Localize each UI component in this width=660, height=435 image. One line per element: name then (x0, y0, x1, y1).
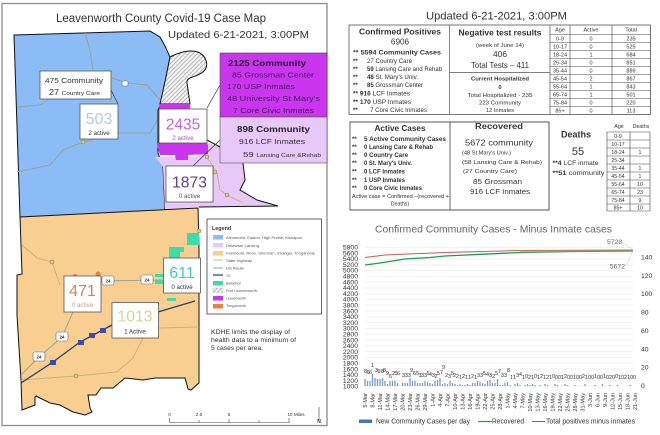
x-axis date labels: 19-Apr (476, 393, 482, 410)
current hospitalized: Current Hospitalized (471, 76, 529, 82)
age table: active and total: 684 (626, 52, 636, 58)
age table: active and total: 113 (627, 108, 635, 114)
x-axis date labels: 3-Jun (588, 393, 594, 407)
callout: 1013 (112, 302, 158, 338)
interstate markers (50, 328, 106, 365)
age table: active and total: 10-17 (553, 44, 567, 50)
panel: top stats table (349, 25, 650, 114)
age table: active and total: 1 (589, 92, 593, 98)
legend: 70 (226, 274, 230, 278)
current hospitalized: 0 (498, 85, 502, 91)
left axis: 5000 (343, 268, 358, 275)
KDHE note: health data to a minimum of (211, 337, 296, 344)
age table: active and total: 851 (626, 60, 636, 66)
callout: 2125 community (220, 53, 327, 117)
KDHE note: 5 cases per area. (211, 345, 263, 352)
legend: Basehor (226, 282, 242, 286)
age table: deaths: 18-24 (611, 150, 625, 156)
active cases: 1 USP Inmates (364, 178, 406, 184)
chart title: Confirmed Community Cases - Minus Inmate cases (375, 224, 612, 236)
age table: active and total: Age (555, 28, 565, 34)
age table: active and total: 25-34 (553, 60, 567, 66)
age table: active and total: 0 (589, 36, 593, 42)
age table: deaths: 1 (639, 174, 642, 180)
active cases: ** (352, 170, 357, 176)
callout: 471: 0 active (72, 302, 94, 309)
age table: active and total: 0 (589, 44, 593, 50)
chart legend: New Community Cases per day (376, 418, 470, 426)
age table: active and total: 45-54 (553, 76, 567, 82)
callout: 1873 (166, 166, 213, 202)
age table: deaths: 55-64 (611, 182, 625, 188)
age table: deaths: Deaths (633, 124, 650, 130)
recovered: Recovered (475, 122, 523, 131)
legend: US Route (226, 266, 244, 270)
age table: active and total: Total (625, 28, 637, 34)
callout: 471 (64, 276, 101, 312)
x-axis date labels: 1-Apr (430, 393, 436, 407)
legend (207, 219, 322, 314)
confirmed positives: ** (353, 75, 358, 81)
negative test results: Negative test results (458, 28, 542, 38)
age table: active and total: 0 (589, 108, 593, 114)
callout: 503: 503 (86, 111, 112, 128)
active cases: ** (352, 137, 357, 143)
bar data labels: 81134102101212100 (507, 368, 558, 381)
active cases: ** (352, 153, 357, 159)
age table: deaths: 10-17 (611, 142, 625, 148)
right axis: 100 (641, 291, 653, 298)
confirmed positives: ** (353, 59, 358, 65)
age table: active and total: 867 (626, 76, 636, 82)
age table: deaths: 35-44 (611, 166, 625, 172)
right axis: 120 (641, 273, 653, 280)
confirmed positives: ** 5594 Community Cases (353, 50, 442, 56)
x-axis date labels: 9-Jun (603, 393, 609, 407)
callout: 5728 (607, 239, 633, 250)
x-axis date labels: 4-Apr (438, 393, 444, 407)
age table: deaths: 1 (639, 166, 642, 172)
callout: 475 community: 475 Community (45, 76, 103, 85)
age table: active and total: 0-9 (556, 36, 564, 42)
age table: deaths: 85+ (614, 206, 622, 212)
legend: Alexandria, Easton, High Prairie, Kickapoo (226, 236, 302, 240)
left axis: 4600 (343, 279, 358, 286)
scale bar: 10 Miles (287, 412, 305, 417)
current hospitalized: 12 Inmates (486, 108, 514, 114)
x-axis date labels: 11-Mar (378, 393, 384, 410)
active cases: Active Cases (374, 124, 426, 133)
age table: deaths: 0-9 (614, 134, 622, 140)
confirmed positives: 6906 (391, 38, 410, 46)
x-axis date labels: 1-May (506, 393, 512, 409)
recovered: (58 Lansing Care & Rehab) (462, 160, 542, 166)
age table: active and total: 85+ (555, 108, 565, 114)
left axis: 5200 (343, 262, 358, 269)
x-axis date labels (363, 393, 639, 412)
county boundary east (199, 140, 278, 207)
active cases: Active case = Confirmed –(recovered + (352, 194, 449, 200)
left axis: 2600 (343, 337, 358, 344)
age table: deaths: 1 (639, 150, 642, 156)
chart: confirmed community cases (343, 224, 653, 426)
callout: 898 community: 898 Community (237, 124, 310, 134)
left axis: 3600 (343, 308, 358, 315)
x-axis date labels: 28-May (573, 393, 579, 412)
active cases: 0 Core Civic Inmates (364, 186, 423, 192)
left axis (343, 244, 358, 391)
active cases: 0 LCF Inmates (364, 170, 406, 176)
age table: deaths: 10 (637, 206, 643, 212)
bar data labels: 21211213354325733 (456, 369, 507, 381)
age table: active and total: 1 (589, 52, 593, 58)
callout: 471: 471 (69, 283, 96, 300)
right axis: 20 (641, 365, 649, 372)
x-axis date labels: 26-Mar (416, 393, 422, 411)
state highway markers (50, 140, 229, 378)
left axis: 5800 (343, 244, 358, 252)
callout: 2435 (159, 109, 207, 143)
region: Tonganoxie orange (73, 272, 100, 278)
age table: active and total: 35-44 (553, 68, 567, 74)
active cases: ** (352, 145, 357, 151)
negative test results: 406 (493, 49, 507, 59)
x-axis date labels: 18-Jun (626, 393, 632, 410)
left axis: 2400 (343, 343, 358, 350)
panel: second stats table (350, 122, 650, 212)
age table: active and total: 501 (626, 92, 636, 98)
age table: active and total: Active (584, 28, 598, 34)
leader lines (111, 85, 220, 166)
left axis: 2000 (343, 355, 358, 362)
left axis: 3200 (343, 320, 358, 327)
callout: 2435: 2 active (172, 135, 194, 142)
negative test results (458, 28, 542, 70)
left axis: 2800 (343, 332, 358, 338)
left axis: 4000 (343, 297, 358, 304)
callout: 2125 community: 48 University St Mary's (227, 94, 320, 103)
x-axis date labels: 7-May (520, 393, 526, 409)
right axis: 80 (641, 310, 649, 316)
age table: active and total: 55-64 (553, 84, 567, 90)
confirmed positives: ** (353, 67, 358, 73)
left axis: 4200 (343, 291, 358, 298)
x-axis date labels: 29-Mar (423, 393, 429, 411)
confirmed positives: ** 916 LCF Inmates (353, 92, 410, 98)
x-axis date labels: 16-May (543, 393, 549, 412)
callout: 1013: 1 Active (124, 328, 146, 336)
map title: Leavenworth County Covid-19 Case Map (56, 13, 266, 25)
confirmed positives: 85 Grossman Center (367, 83, 423, 89)
age table: deaths: 25-34 (611, 158, 625, 164)
age table: deaths: 75-84 (611, 198, 625, 204)
x-axis date labels: 19-May (550, 393, 556, 412)
x-axis date labels: 20-Mar (400, 393, 406, 411)
callout: 2435: 2435 (166, 116, 200, 134)
region: Fort Leavenworth hatch (160, 51, 207, 104)
callout: 1873: 1873 (172, 174, 207, 192)
age table: deaths: 45-54 (611, 174, 625, 180)
x-axis date labels: 5-Mar (363, 393, 369, 408)
left axis: 4400 (343, 285, 358, 292)
active cases: ** (352, 178, 357, 184)
left axis: 5600 (343, 250, 358, 257)
bars: new community cases per day (365, 374, 630, 386)
legend: Tonganoxie (226, 304, 246, 308)
recovered: 916 LCF Inmates (470, 187, 530, 196)
age table: deaths: 9 (639, 198, 642, 204)
callout: 5728: 5728 (607, 239, 622, 246)
legend: Legend (212, 226, 231, 232)
current hospitalized: 223 Community (479, 100, 521, 106)
panel: county case map (2, 4, 327, 426)
shield numbers: 24 (36, 354, 42, 360)
north arrow (317, 407, 321, 425)
legend: Fairmount, Reno, Sherman, Stranger, Tonganoxie (226, 252, 315, 256)
roads (17, 33, 243, 383)
region: blue townships (14, 31, 170, 218)
age table: active and total: 220 (626, 100, 636, 106)
deaths: Deaths (561, 130, 591, 140)
callout: 2125 community: 170 USP Inmates (227, 82, 295, 91)
left axis: 4800 (343, 274, 358, 280)
negative test results: (week of June 14) (476, 43, 524, 49)
right axis: 40 (641, 346, 649, 353)
age table: deaths: 10 (637, 182, 643, 188)
callout: 898 community: 916 LCF Inmates (239, 137, 305, 146)
deaths (552, 130, 605, 177)
x-axis date labels: 16-Apr (468, 393, 474, 410)
confirmed positives: ** 170 USP Inmates (353, 100, 411, 106)
age table: active and total: 0 (589, 68, 593, 74)
x-axis date labels: 25-May (566, 393, 572, 412)
age table: deaths: 23 (637, 190, 643, 196)
age table: active and total: 0 (589, 60, 593, 66)
recovered: (48 St Mary's Univ.) (462, 150, 511, 156)
scale bar: 2.5 (196, 412, 203, 417)
chart legend: Recovered (492, 418, 524, 426)
recovered: 5672 community (465, 138, 534, 148)
age table: active and total: 1 (589, 84, 593, 90)
shield numbers (36, 278, 150, 360)
deaths: **4 LCF inmate (552, 160, 599, 167)
callout: 5672: 5672 (610, 264, 625, 270)
confirmed positives: 59 Lansing Care and Rehab (367, 67, 443, 73)
left axis: 1800 (343, 360, 358, 368)
callout: 898 community: 59 Lansing Care &Rehab (243, 150, 321, 159)
age table: active and total: 2 (589, 76, 593, 82)
active cases: 0 Lansing Care & Rehab (364, 145, 433, 151)
age table: active and total: 525 (626, 44, 636, 50)
grid lines (365, 248, 633, 386)
x-axis date labels: 10-Apr (453, 393, 459, 410)
callout: 611 (164, 258, 200, 293)
scale bar (168, 412, 305, 422)
age table: deaths: 65-74 (611, 190, 625, 196)
left axis: 1200 (343, 378, 358, 385)
right axis: 0 (641, 383, 645, 390)
left axis: 1000 (343, 384, 358, 391)
x-axis date labels: 21-Jun (633, 393, 639, 410)
bar data labels: 8661398896256333 (364, 363, 411, 380)
right axis: 140 (641, 254, 653, 262)
legend: State Highway (226, 259, 252, 263)
map updated date: Updated 6-21-2021, 3:00PM (168, 29, 309, 41)
confirmed positives: ** (353, 83, 358, 89)
bar data labels (364, 363, 636, 381)
road shields (33, 81, 153, 361)
x-axis date labels: 25-Apr (490, 393, 496, 410)
callout: 611: 0 active (171, 284, 193, 291)
legend: Delaware Lansing (226, 244, 259, 248)
x-axis date labels: 31-May (580, 393, 586, 412)
callout: 503 (80, 104, 118, 139)
age table: active and total: 18-24 (553, 52, 567, 58)
x-axis date labels: 14-Mar (386, 393, 392, 411)
bar data labels: 01200100210010010200102100 (558, 374, 636, 381)
callout: 2125 community: 85 Grossman Center (232, 70, 315, 80)
callout: 503: 2 active (88, 130, 110, 137)
callout: 475 community: 27 Country Care (49, 88, 100, 97)
current hospitalized (468, 76, 532, 114)
left axis: 2200 (343, 349, 358, 356)
right axis: 60 (641, 328, 649, 335)
right axis (641, 254, 653, 390)
age table: active and total: 889 (626, 68, 636, 74)
active cases: 0 St. Mary's Univ. (364, 161, 412, 167)
age table: active and total: 65-74 (553, 92, 567, 98)
active cases (352, 124, 449, 208)
region: tan townships (17, 208, 199, 415)
left axis: 3400 (343, 314, 358, 321)
heading: dashboard updated date: Updated 6-21-2021, 3:00PM (426, 10, 567, 22)
confirmed positives: 48 St. Mary's Univ. (367, 75, 418, 81)
region: Basehor teal (155, 233, 199, 301)
callout: 611: 611 (169, 265, 195, 282)
x-axis date labels: 7-Apr (446, 393, 452, 407)
active cases: ** (352, 186, 357, 192)
confirmed positives: 27 Country Care (367, 59, 413, 65)
shield numbers: 24 (59, 334, 65, 340)
left axis: 1600 (343, 366, 358, 373)
shield numbers: 24 (144, 278, 150, 282)
callout: 2125 community: 2125 Community (228, 58, 306, 68)
x-axis date labels: 17-Mar (393, 393, 399, 411)
region: Leavenworth city purple (157, 104, 208, 160)
x-axis date labels: 13-May (536, 393, 542, 412)
left axis: 5400 (343, 256, 358, 263)
x-axis date labels: 10-May (528, 393, 534, 412)
active cases: ** (352, 161, 357, 167)
callout: 1013: 1013 (118, 308, 153, 326)
age table: active and total: 0 (589, 100, 593, 106)
x-axis date labels: 6-Jun (596, 393, 602, 407)
legend: Fort Leavenworth (226, 289, 257, 293)
scale bar: 0 (168, 412, 171, 417)
confirmed positives (353, 28, 443, 114)
KDHE note: KDHE limits the display of (211, 329, 290, 336)
recovered: 85 Grossman (473, 177, 522, 186)
left axis: 1400 (343, 372, 358, 379)
age table: active and total: 75-84 (553, 100, 567, 106)
age table: active and total (550, 25, 650, 114)
fill between end of lines (520, 250, 633, 252)
x-axis date labels: 28-Apr (498, 393, 504, 410)
confirmed positives: Confirmed Positives (359, 28, 441, 36)
x-axis date labels: 8-Mar (370, 393, 376, 408)
line: recovered (365, 251, 633, 265)
callout: 475 community (40, 71, 111, 99)
age table: deaths (607, 124, 650, 212)
x-axis date labels: 12-Jun (610, 393, 616, 410)
active cases: 0 Country Care (364, 153, 409, 159)
age table: active and total: 843 (626, 84, 636, 90)
chart legend: Total positives minus inmates (546, 418, 635, 426)
active cases: 5 Active Community Cases (364, 137, 447, 143)
x-axis date labels: 22-Apr (483, 393, 489, 410)
x-axis date labels: 15-Jun (618, 393, 624, 410)
active cases: Deaths) (391, 202, 409, 208)
shield numbers: 24 (105, 278, 111, 284)
recovered (462, 122, 542, 196)
region: Delaware Lansing light purple (155, 143, 278, 210)
callout: 5672 (610, 253, 632, 270)
x-axis date labels: 22-May (558, 393, 564, 412)
negative test results: Total Tests – 411 (471, 60, 529, 70)
deaths: 55 (572, 146, 584, 158)
bar data labels: 96533354325792352 (410, 365, 456, 380)
deaths: **51 community (552, 170, 605, 177)
age table: active and total: 235 (626, 36, 636, 42)
x-axis date labels: 23-Mar (408, 393, 414, 411)
left axis: 3800 (343, 302, 358, 310)
x-axis date labels: 4-May (513, 393, 519, 409)
age table: deaths: Age (614, 124, 624, 130)
confirmed positives: ** (353, 108, 358, 114)
x-axis date labels: 13-Apr (460, 393, 466, 410)
callout: 1873: 0 active (179, 193, 201, 200)
north arrow: N (317, 419, 321, 425)
KDHE note (211, 329, 296, 352)
chart legend (359, 418, 635, 426)
legend: Leavenworth (226, 296, 246, 300)
confirmed positives: 7 Core Civic Inmates (370, 108, 427, 114)
callout: 2125 community: 7 Core Civic Inmates (233, 106, 314, 115)
current hospitalized: Total Hospitalized - 235 (468, 93, 532, 99)
scale bar: 5 (228, 412, 231, 417)
line: total positives minus inmates (365, 250, 633, 258)
callout: 898 community (220, 117, 327, 163)
recovered: (27 Country Care) (463, 169, 517, 175)
left axis: 3000 (343, 326, 358, 333)
